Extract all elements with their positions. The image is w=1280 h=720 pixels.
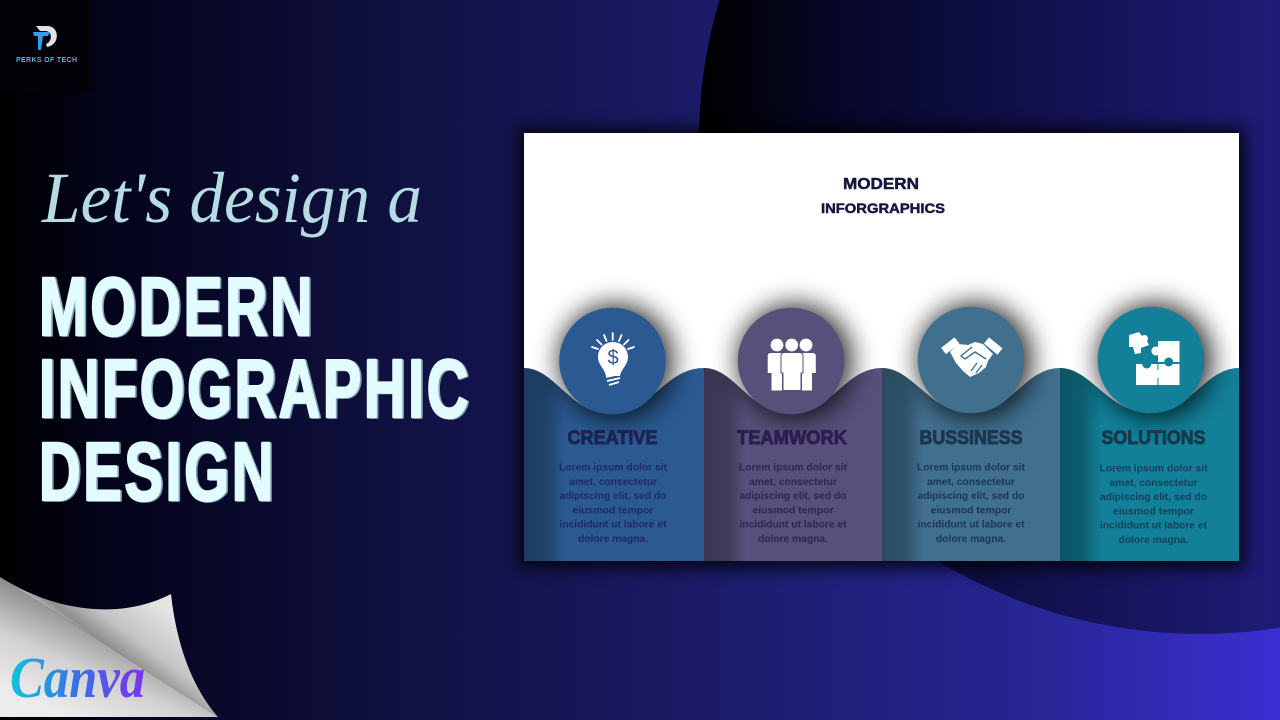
description: teamwork: incididunt ut labore et bbox=[740, 518, 847, 530]
icon circle: teamwork bbox=[738, 308, 844, 414]
description: business: Lorem ipsum dolor sit bbox=[917, 462, 1025, 474]
column: business bbox=[917, 307, 1025, 545]
column: teamwork bbox=[737, 308, 847, 545]
description: creative: Lorem ipsum dolor sit bbox=[559, 462, 667, 474]
description: creative: eiusmod tempor bbox=[572, 504, 654, 516]
description: business: dolore magna. bbox=[936, 533, 1006, 545]
page curl with Canva logo: Canva bbox=[10, 645, 145, 710]
icon: light bulb with dollar: $ bbox=[607, 347, 619, 369]
label: teamwork: TEAMWORK bbox=[737, 428, 847, 449]
icon: handshake bbox=[944, 340, 1000, 377]
icon circle: business bbox=[918, 307, 1024, 413]
description: business: incididunt ut labore et bbox=[918, 518, 1025, 530]
column: solutions bbox=[1098, 307, 1208, 546]
description: teamwork: amet, consectetur bbox=[749, 476, 837, 488]
label: solutions: SOLUTIONS bbox=[1102, 428, 1206, 449]
icon: puzzle pieces bbox=[1129, 332, 1180, 385]
description: solutions: dolore magna. bbox=[1118, 534, 1189, 546]
title shadow bbox=[41, 261, 473, 519]
column backgrounds with side shading bbox=[524, 360, 1239, 561]
panel shadow bbox=[518, 128, 1245, 568]
description: solutions: eiusmod tempor bbox=[1113, 506, 1194, 518]
icon: light bulb with dollar bbox=[592, 333, 634, 385]
description: teamwork bbox=[739, 462, 847, 545]
logo: Perks of Tech: PERKS OF TECH bbox=[16, 57, 77, 64]
description: teamwork: adipiscing elit, sed do bbox=[740, 490, 846, 502]
description: solutions: incididunt ut labore et bbox=[1100, 520, 1207, 532]
script heading: Let's design a: Let's design a bbox=[41, 158, 422, 238]
label: creative: CREATIVE bbox=[568, 428, 658, 449]
label: business: BUSSINESS bbox=[920, 428, 1022, 449]
description: solutions bbox=[1100, 462, 1208, 546]
panel heading: MODERN bbox=[843, 176, 919, 193]
icon: three people bbox=[768, 339, 816, 390]
description: creative: adipiscing elit, sed do bbox=[560, 490, 666, 502]
large dark circle background shape bbox=[699, 0, 1280, 634]
main title bbox=[39, 260, 473, 519]
description: solutions: Lorem ipsum dolor sit bbox=[1100, 462, 1208, 474]
description: teamwork: eiusmod tempor bbox=[752, 504, 834, 516]
logo: Perks of Tech bbox=[0, 0, 92, 92]
description: teamwork: dolore magna. bbox=[758, 533, 828, 545]
description: teamwork: Lorem ipsum dolor sit bbox=[739, 462, 847, 474]
description: business: eiusmod tempor bbox=[930, 504, 1012, 516]
icon circle: creative bbox=[559, 308, 666, 414]
description: creative bbox=[559, 462, 667, 545]
description: creative: incididunt ut labore et bbox=[560, 518, 667, 530]
page curl with Canva logo bbox=[0, 577, 218, 717]
title line: MODERN: MODERN bbox=[39, 260, 315, 353]
description: solutions: adipiscing elit, sed do bbox=[1100, 491, 1207, 503]
description: business: adipiscing elit, sed do bbox=[918, 490, 1024, 502]
icon circle: solutions bbox=[1098, 307, 1204, 413]
column: creative bbox=[559, 308, 667, 545]
description: business bbox=[917, 462, 1025, 545]
circle shadows bbox=[559, 303, 1212, 418]
title shadow: INFOGRAPHIC bbox=[41, 343, 473, 436]
panel background bbox=[524, 133, 1239, 561]
infographic panel bbox=[524, 133, 1239, 561]
title line: INFOGRAPHIC: INFOGRAPHIC bbox=[39, 342, 471, 435]
title line: DESIGN: DESIGN bbox=[39, 425, 276, 518]
title shadow: MODERN bbox=[41, 261, 317, 354]
description: solutions: amet, consectetur bbox=[1110, 477, 1198, 489]
description: creative: dolore magna. bbox=[578, 533, 648, 545]
panel heading: INFORGRAPHICS bbox=[821, 200, 945, 216]
description: creative: amet, consectetur bbox=[569, 476, 657, 488]
description: business: amet, consectetur bbox=[927, 476, 1015, 488]
panel heading bbox=[821, 176, 945, 216]
title shadow: DESIGN bbox=[41, 426, 278, 519]
